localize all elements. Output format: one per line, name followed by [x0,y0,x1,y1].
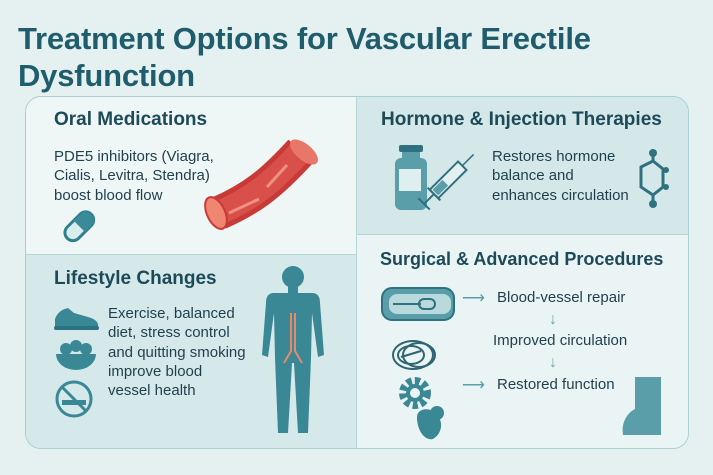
icon: salad bowl [56,340,96,370]
arrow: down 2: ↓ [549,354,557,371]
heading: oral medications: Oral Medications [54,109,207,130]
text: lifestyle: diet, stress control [108,324,230,341]
text: hormone: Restores hormone [492,148,615,165]
icon: pill [63,210,96,242]
text: hormone: enhances circulation [492,187,629,204]
text: oral medications [54,148,214,204]
heading: surgical: Surgical & Advanced Procedures [380,249,663,269]
panel: surgical and advanced procedures [357,235,690,450]
text: lifestyle: and quitting smoking [108,344,246,361]
icon: rings [392,340,436,370]
main panel [25,96,689,449]
title: Treatment Options for Vascular Erectile [18,21,591,56]
text: hormone: balance and [492,167,574,184]
icon: shoe [54,308,99,330]
icon: pelvis shape [622,377,661,435]
text: lifestyle: Exercise, balanced [108,305,235,322]
arrow: to restored: ⟶ [462,377,485,394]
text: lifestyle: vessel health [108,382,196,399]
panel: lifestyle changes [26,255,357,450]
icon: syringe [418,154,474,210]
icon: human figure [262,266,324,433]
title: Dysfunction [18,58,195,93]
text: oral medications: PDE5 inhibitors (Viagra, [54,148,214,165]
text: oral medications: boost blood flow [54,187,162,204]
arrow: down 1: ↓ [549,311,557,328]
arrow: to repair: ⟶ [462,290,485,307]
icon: vessel catheter [381,287,455,321]
text: blood-vessel repair: Blood-vessel repair [497,289,625,306]
text: oral medications: Cialis, Levitra, Stendra) [54,167,210,184]
icon: blood vessel [204,140,318,230]
title [18,21,591,93]
panel: hormone and injection therapies [357,97,690,235]
text: lifestyle: improve blood [108,363,202,380]
text: hormone [492,148,629,204]
icon: vial [395,145,427,210]
heading: hormone: Hormone & Injection Therapies [381,109,662,130]
icon: molecule [640,149,669,208]
icon: gears and heart [399,377,444,440]
text: lifestyle [108,305,246,399]
text: restored function: Restored function [497,376,615,393]
heading: lifestyle changes: Lifestyle Changes [54,268,217,289]
text: improved circulation: Improved circulation [493,332,627,349]
panel: oral medications [26,97,357,255]
icon: no smoking [56,380,92,418]
